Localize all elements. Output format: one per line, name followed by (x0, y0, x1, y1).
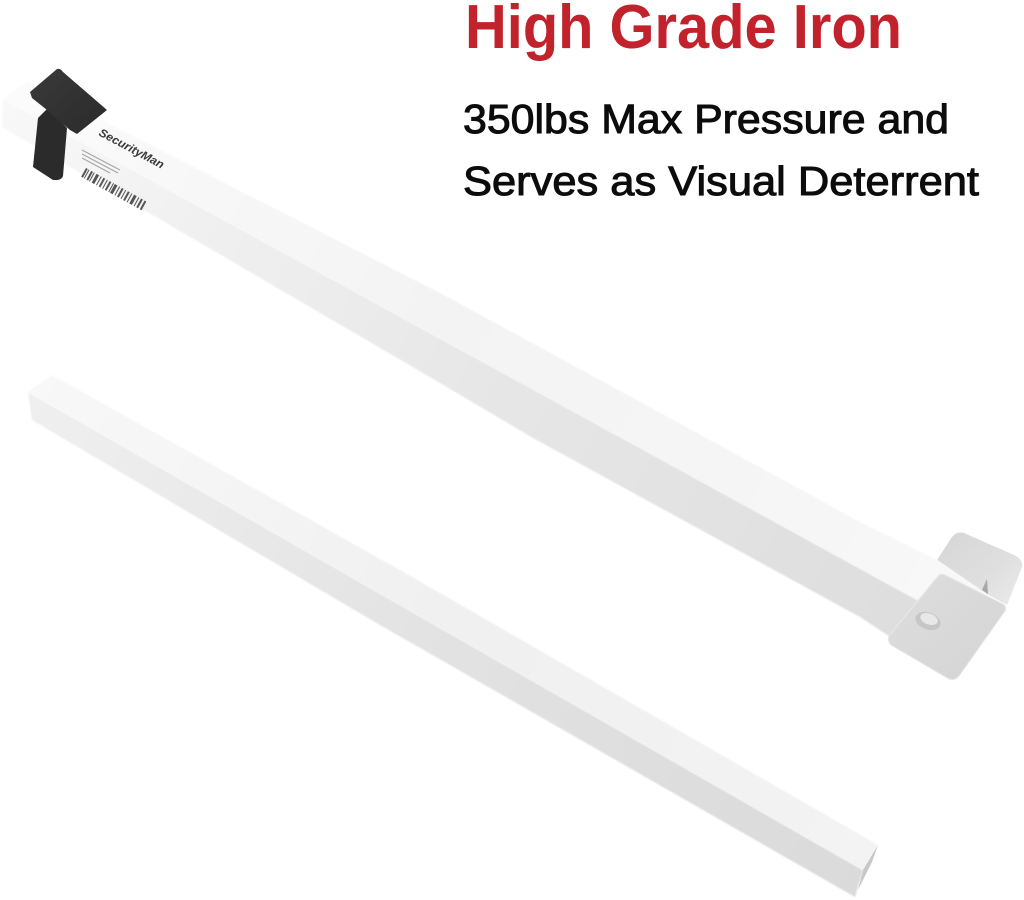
lower iron bar (28, 375, 878, 897)
product label text (82, 150, 120, 173)
subheading text block: 350lbs Max Pressure and (463, 96, 949, 142)
subheading text block (463, 96, 980, 204)
bracket back plate (937, 532, 1022, 605)
barcode (81, 168, 146, 210)
bar upper face (28, 375, 878, 870)
bar lower face (2, 99, 940, 640)
bar lower face (28, 392, 863, 897)
subheading text block: Serves as Visual Deterrent (463, 158, 980, 204)
bracket front plate (888, 574, 1006, 680)
black clip top flap (30, 69, 107, 134)
brand logo: SecurityMan (97, 127, 166, 171)
black clip lower strap (33, 108, 67, 180)
bar upper face (3, 82, 985, 600)
bar open end (858, 845, 878, 890)
bracket slot shadow (982, 579, 988, 594)
upper iron bar with bracket (2, 69, 1022, 680)
bracket bolt (913, 609, 943, 633)
